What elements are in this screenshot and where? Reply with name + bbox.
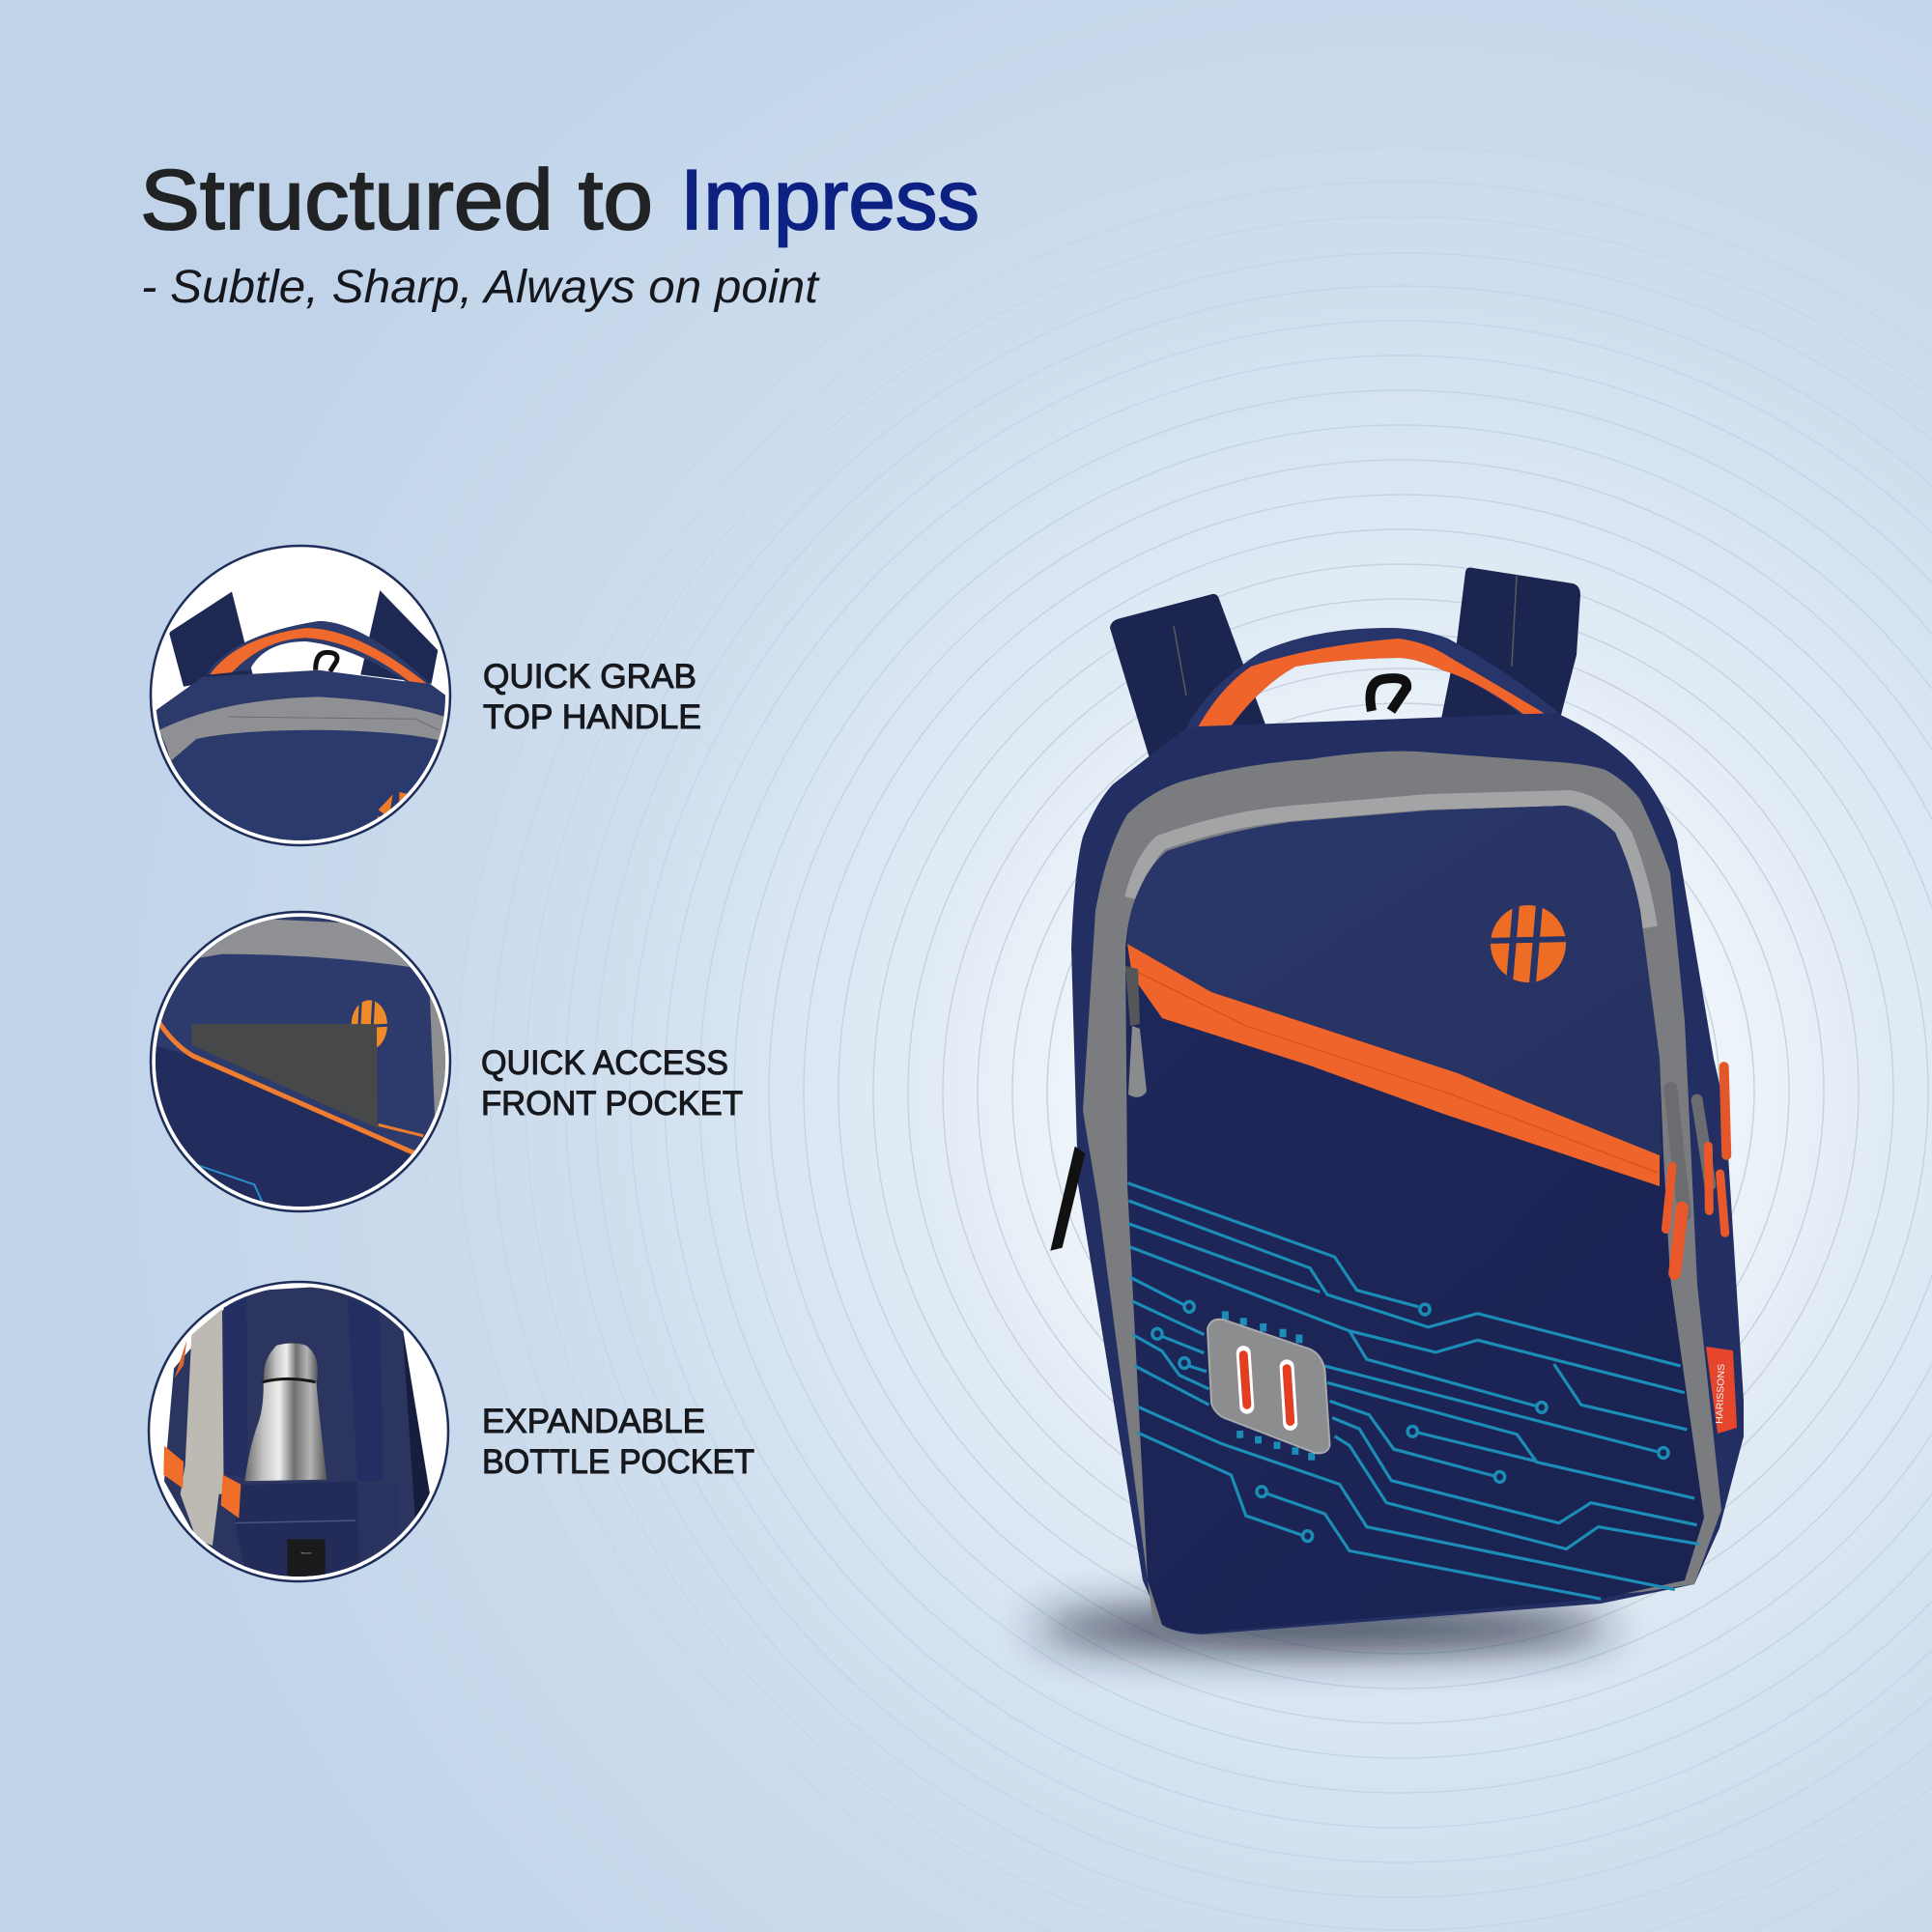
right zip pulls — [1665, 1066, 1726, 1273]
drop shadow under backpack — [1034, 1605, 1613, 1652]
circle photo: front pocket — [148, 907, 454, 1218]
top handle — [1184, 628, 1563, 734]
front panel upper — [1127, 806, 1662, 1159]
label: expandable bottle pocket: EXPANDABLE — [482, 1403, 705, 1440]
logo emblem — [1491, 905, 1566, 982]
label: expandable bottle pocket: BOTTLE POCKET — [482, 1443, 754, 1481]
label: quick access front pocket — [481, 1044, 743, 1122]
front panel lower — [1125, 806, 1704, 1633]
backpack body — [1071, 713, 1744, 1634]
shoulder straps — [1110, 568, 1580, 758]
circle photo: bottle pocket — [149, 1282, 448, 1584]
callout: bottle pocket — [149, 1282, 754, 1584]
left zip pull — [1125, 966, 1147, 1097]
title — [140, 152, 980, 247]
callout: top handle — [151, 546, 701, 850]
label: expandable bottle pocket — [482, 1403, 754, 1481]
chip patch — [1208, 1320, 1330, 1453]
subtitle: - Subtle, Sharp, Always on point — [141, 262, 820, 313]
title: Impress — [680, 152, 980, 247]
main backpack — [1053, 568, 1744, 1634]
label: quick grab top handle: QUICK GRAB — [483, 658, 696, 696]
label: quick grab top handle: TOP HANDLE — [483, 698, 701, 736]
brand tag — [1706, 1347, 1737, 1434]
label: quick access front pocket: QUICK ACCESS — [481, 1044, 728, 1082]
orange zipper — [1127, 944, 1660, 1186]
lighter piping — [1132, 798, 1650, 927]
title: Structured to — [140, 152, 653, 247]
grey trim — [1083, 752, 1721, 1627]
callout: front pocket — [148, 907, 743, 1218]
circle photo: bottle pocket: SINCE 1951 — [300, 1552, 311, 1554]
label: quick access front pocket: FRONT POCKET — [481, 1085, 743, 1122]
circuit pattern — [1127, 1183, 1699, 1599]
circle photo: top handle — [151, 546, 451, 850]
side strap — [1053, 1150, 1083, 1248]
brand tag: HARISSONS — [1715, 1363, 1727, 1424]
label: quick grab top handle — [483, 658, 701, 736]
